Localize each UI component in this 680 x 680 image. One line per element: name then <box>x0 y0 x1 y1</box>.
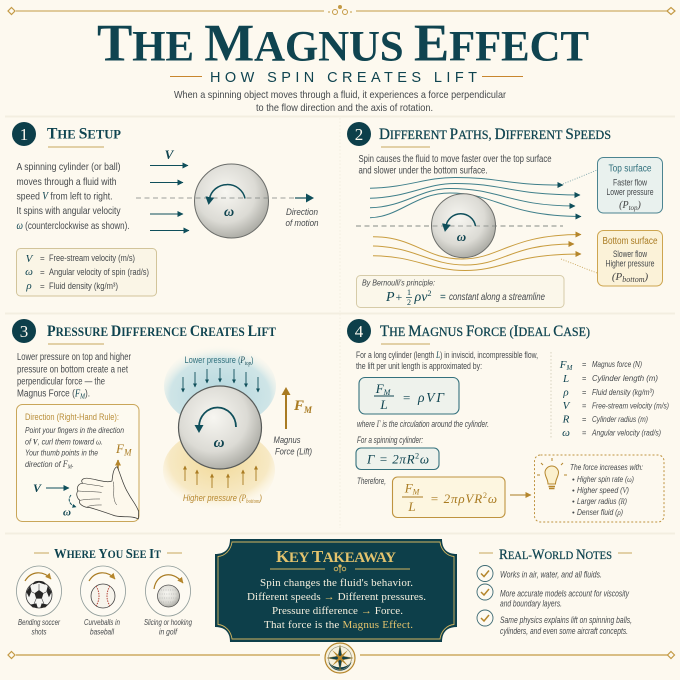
symbol legend: R <box>562 414 570 426</box>
right-hand rule box: direction of F <box>25 459 69 470</box>
heading: WHERE YOU SEE IT <box>54 547 161 562</box>
key takeaway plaque <box>215 539 457 642</box>
takeaway text: That force is the Magnus Effect. <box>264 619 413 631</box>
takeaway text <box>247 577 426 631</box>
soccer example <box>16 566 62 636</box>
section 2 heading <box>347 122 611 147</box>
force description <box>356 350 538 371</box>
panel: real-world notes <box>477 547 632 636</box>
section 3 heading: 3 <box>20 322 28 341</box>
Bernoulli box: 2 <box>427 289 431 298</box>
symbol legend: L <box>562 373 569 385</box>
spinning ball <box>136 164 295 238</box>
section 2 heading: DIFFERENT PATHS, DIFFERENT SPEEDS <box>379 126 611 143</box>
low pressure label: ) <box>251 355 254 366</box>
symbol legend: Fluid density (kg/m³) <box>592 387 654 397</box>
note 3 <box>477 610 632 636</box>
intro text: to the flow direction and the axis of rotation. <box>256 102 433 114</box>
direction of motion: Direction <box>286 207 318 217</box>
teal streamlines <box>370 178 581 218</box>
section 1 heading <box>12 122 121 147</box>
paths description <box>358 154 552 176</box>
equation: circulation: ω <box>420 452 429 466</box>
pressure description: Magnus Force (F <box>17 388 87 400</box>
setup description: It spins with angular velocity <box>16 205 121 217</box>
variable legend: = <box>40 254 45 263</box>
intro text: When a spinning object moves through a fluid, it experiences a force perpendicular <box>174 89 506 101</box>
bottom surface callout <box>561 230 662 286</box>
force label and arrow: F <box>116 441 124 456</box>
symbol legend <box>559 359 669 439</box>
takeaway text: Pressure difference → Force. <box>272 605 403 617</box>
symbol legend: = <box>582 388 587 397</box>
therefore label: Therefore, <box>357 476 386 486</box>
setup description: speed V from left to right. <box>16 190 112 202</box>
variable legend: V <box>26 253 34 265</box>
Bernoulli box <box>356 276 564 308</box>
lift force arrow: F <box>294 398 304 414</box>
ball with spin: ω <box>457 229 466 244</box>
takeaway heading: KEY TAKEAWAY <box>276 547 396 566</box>
low pressure label: top <box>245 361 251 367</box>
pressure diagram <box>163 345 313 511</box>
equation: final Magnus force: ω <box>488 491 497 506</box>
symbol legend: ρ <box>562 386 569 398</box>
note 1: Works in air, water, and all fluids. <box>500 570 602 580</box>
velocity arrows: V <box>165 147 175 162</box>
equation: lift per unit length: M <box>383 388 392 397</box>
symbol legend: V <box>563 400 571 412</box>
pressure description: ). <box>85 388 90 400</box>
baseball example <box>80 566 126 636</box>
variable legend: Free-stream velocity (m/s) <box>49 253 135 263</box>
right-hand rule box: Direction (Right-Hand Rule): <box>25 412 119 422</box>
gold streamlines <box>373 234 581 270</box>
high pressure zone <box>163 429 275 511</box>
bottom surface callout: Higher pressure <box>606 258 654 268</box>
pressure description: Lower pressure on top and higher <box>17 352 132 363</box>
setup description: ω (counterclockwise as shown). <box>16 218 130 232</box>
pressure description: perpendicular force — the <box>17 376 105 388</box>
top surface callout: Faster flow <box>613 178 647 188</box>
variable legend: ω <box>25 266 33 278</box>
top surface callout: ) <box>637 200 642 211</box>
top surface callout: Top surface <box>608 164 652 174</box>
low pressure zone <box>164 345 276 427</box>
velocity arrows <box>150 147 189 230</box>
symbol legend: = <box>582 415 587 424</box>
equation: final Magnus force: M <box>412 488 421 496</box>
top surface callout: (P <box>619 200 629 211</box>
top surface callout: top <box>629 204 638 212</box>
variable legend: Fluid density (kg/m³) <box>49 281 118 291</box>
section 2 heading: 2 <box>355 125 363 144</box>
lift force arrow: Force (Lift) <box>275 446 312 458</box>
icon: hand <box>77 467 139 519</box>
force factors box: Higher speed (V) <box>577 485 629 495</box>
equation: final Magnus force <box>392 477 505 518</box>
Bernoulli box: ρv <box>414 290 427 305</box>
icon: baseball <box>91 584 115 608</box>
variable legend <box>16 248 156 296</box>
low pressure label: Lower pressure (P <box>184 355 256 366</box>
upward arrows <box>185 466 256 488</box>
symbol legend: F <box>560 359 566 371</box>
force factors box: The force increases with: <box>570 462 643 472</box>
equation: lift per unit length: L <box>379 397 388 412</box>
ball with spin <box>356 194 563 258</box>
bottom surface callout: Slower flow <box>613 249 647 259</box>
pressure description <box>17 352 132 400</box>
direction of motion <box>286 198 318 228</box>
downward arrows <box>183 368 258 392</box>
force label and arrow <box>115 441 132 472</box>
paths description: and slower under the bottom surface. <box>358 166 488 176</box>
high pressure label: bottom <box>246 499 260 505</box>
variable legend: ρ <box>25 280 32 292</box>
direction of motion: of motion <box>286 218 318 228</box>
note 1 <box>477 566 602 582</box>
omega curl: ω <box>63 506 71 518</box>
symbol legend: = <box>582 428 587 438</box>
top surface callout <box>563 158 662 213</box>
section 4 heading <box>347 319 590 344</box>
section 4 heading: 4 <box>355 322 364 341</box>
Bernoulli box: 2 <box>407 298 411 307</box>
section 4 heading: THE MAGNUS FORCE (IDEAL CASE) <box>380 323 590 340</box>
equation: final Magnus force: = 2πρVR <box>430 491 482 506</box>
Bernoulli box: constant along a streamline <box>449 292 545 303</box>
force description: the lift per unit length is approximated by: <box>356 361 482 371</box>
golf example <box>144 566 192 636</box>
panel: where you see it <box>16 547 192 636</box>
right-hand rule box: . <box>72 459 74 469</box>
symbol legend: = <box>582 374 587 383</box>
Bernoulli box: By Bernoulli's principle: <box>362 278 435 288</box>
title: THE MAGNUS EFFECT <box>97 14 589 72</box>
equation: final Magnus force: L <box>407 499 416 514</box>
ornament rule <box>270 565 410 573</box>
equation: circulation <box>356 448 439 470</box>
baseball example: Curveballs in <box>84 617 120 627</box>
equation: circulation: Γ = 2πR <box>367 452 415 466</box>
icon: compass <box>325 643 355 673</box>
panel: different paths <box>347 122 662 308</box>
symbol legend: ω <box>562 427 570 439</box>
panel: the Magnus force <box>347 319 669 522</box>
takeaway text: Different speeds → Different pressures. <box>247 591 426 603</box>
high pressure label: ) <box>259 493 262 504</box>
symbol legend: M <box>565 364 573 372</box>
variable legend: = <box>40 268 45 277</box>
right-hand rule box: of V, curl them toward ω. <box>25 436 103 446</box>
symbol legend: = <box>582 402 587 410</box>
note 2: and boundary layers. <box>500 598 562 608</box>
intro text <box>174 89 506 114</box>
Bernoulli box: + <box>396 290 402 304</box>
bottom ornament rule <box>8 652 674 658</box>
lift force arrow: M <box>303 405 313 415</box>
pressure description: M <box>79 392 86 400</box>
golf example: in golf <box>159 626 178 636</box>
icon: soccer ball <box>26 581 52 608</box>
note 2: More accurate models account for viscosity <box>500 588 629 598</box>
force description: For a long cylinder (length L) in inviscid, incompressible flow, <box>356 350 538 361</box>
right-hand rule box <box>16 404 139 522</box>
note 2 <box>477 584 629 608</box>
right-hand rule box: Your thumb points in the <box>25 448 98 458</box>
right-hand rule box: M <box>67 464 73 470</box>
force factors box: • <box>572 486 575 495</box>
Bernoulli box: = <box>440 292 446 303</box>
force factors box: Higher spin rate (ω) <box>577 474 634 484</box>
top surface callout: Lower pressure <box>606 187 654 197</box>
force factors box: • <box>572 497 575 506</box>
section 3 heading: PRESSURE DIFFERENCE CREATES LIFT <box>47 323 277 340</box>
lift force arrow <box>274 390 313 458</box>
section 1 heading: THE SETUP <box>47 126 121 142</box>
top ornament rule <box>8 6 675 14</box>
section 1 heading: 1 <box>20 125 28 144</box>
equation: lift per unit length: = <box>403 390 410 405</box>
bottom surface callout: ) <box>643 271 648 283</box>
Bernoulli box: 1 <box>407 288 411 297</box>
velocity label: V <box>33 481 42 495</box>
paths description: Spin causes the fluid to move faster over the top surface <box>358 154 552 165</box>
soccer example: shots <box>32 626 47 636</box>
icon: light bulb <box>537 458 567 488</box>
takeaway text: Spin changes the fluid's behavior. <box>260 577 413 589</box>
equation: lift per unit length: F <box>376 381 384 396</box>
note 3: Same physics explains lift on spinning balls, <box>500 615 632 625</box>
golf example: Slicing or hooking <box>144 617 192 627</box>
force factors box: • <box>572 475 575 484</box>
variable legend: Angular velocity of spin (rad/s) <box>49 267 149 277</box>
force factors box: • <box>572 508 575 517</box>
soccer example: Bending soccer <box>18 617 61 627</box>
baseball example: baseball <box>90 626 115 636</box>
Bernoulli box: P <box>385 290 395 305</box>
bottom surface callout: bottom <box>622 275 645 284</box>
setup description: moves through a fluid with <box>16 176 117 188</box>
symbol legend: Cylinder length (m) <box>592 373 658 383</box>
bottom surface callout: Bottom surface <box>602 236 658 247</box>
equation: lift per unit length <box>359 378 459 414</box>
spinning ball: ω <box>224 205 234 220</box>
note 3: cylinders, and even some aircraft concepts. <box>500 626 628 636</box>
ball: ω <box>214 435 225 451</box>
icon: golf ball <box>158 585 180 607</box>
variable legend: = <box>40 282 45 291</box>
equation: final Magnus force: 2 <box>483 491 487 500</box>
equation: lift per unit length: ρVΓ <box>417 390 445 405</box>
pressure description: pressure on bottom create a net <box>17 364 128 376</box>
panel: the setup <box>12 122 318 296</box>
circulation note: where Γ is the circulation around the cylinder. <box>357 419 489 429</box>
right-hand rule box: Point your fingers in the direction <box>25 425 124 435</box>
arrow to tips <box>510 494 531 496</box>
high pressure label: Higher pressure (P <box>183 493 256 504</box>
equation: circulation: 2 <box>415 452 419 460</box>
symbol legend: Angular velocity (rad/s) <box>591 428 661 438</box>
lift force arrow: Magnus <box>274 435 301 446</box>
bottom surface callout: (P <box>612 271 622 283</box>
force factors box: Larger radius (R) <box>577 496 627 506</box>
heading: REAL-WORLD NOTES <box>499 547 612 563</box>
symbol legend: Magnus force (N) <box>592 359 642 369</box>
equation: final Magnus force: F <box>405 480 413 496</box>
force label and arrow: M <box>123 448 132 458</box>
symbol legend: Cylinder radius (m) <box>592 414 648 424</box>
setup description <box>16 161 130 232</box>
setup description: A spinning cylinder (or ball) <box>16 161 120 173</box>
spinning cylinder label: For a spinning cylinder: <box>357 435 423 445</box>
ball <box>178 386 262 469</box>
subtitle: HOW SPIN CREATES LIFT <box>210 70 477 86</box>
symbol legend: = <box>582 360 587 369</box>
force factors box <box>534 455 664 522</box>
force factors box: Denser fluid (ρ) <box>577 507 623 517</box>
section 3 heading <box>12 319 277 344</box>
panel: pressure difference <box>12 319 313 522</box>
